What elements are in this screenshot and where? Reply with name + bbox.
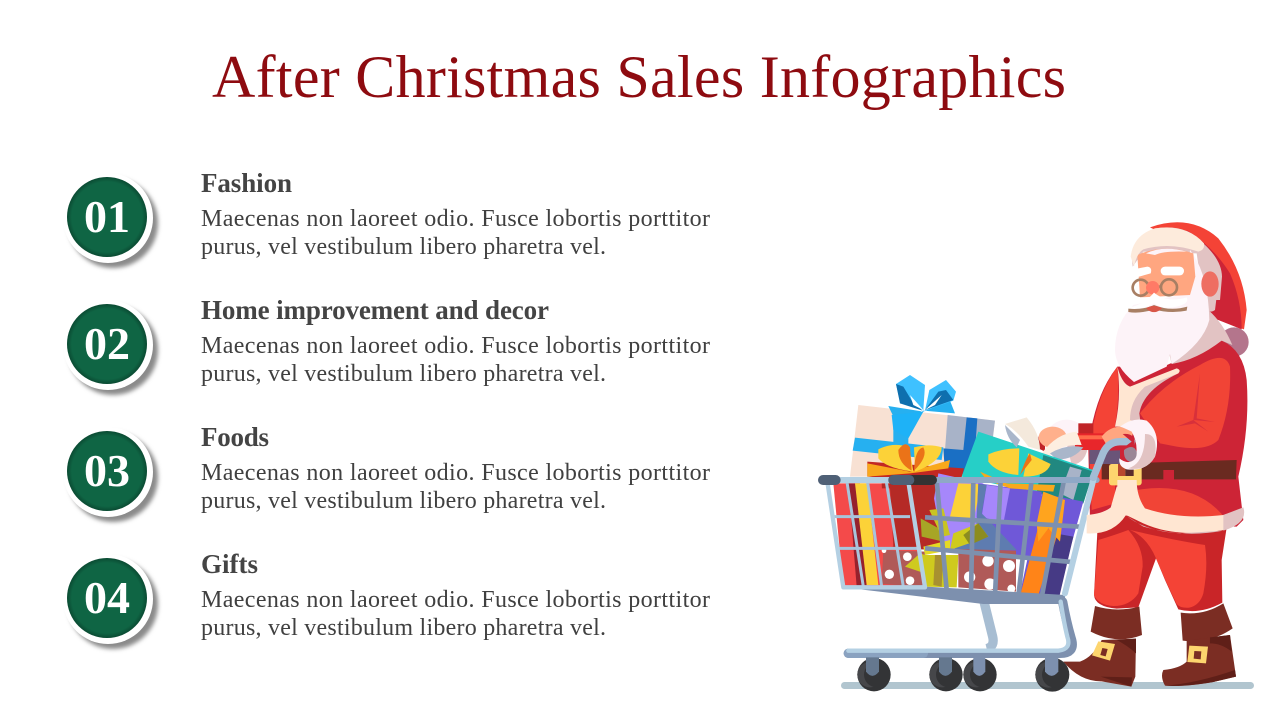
spotted gift right	[958, 549, 1016, 592]
item 4: Gifts	[63, 549, 710, 649]
gold bow on teal gift	[980, 472, 1055, 492]
badge 02	[63, 300, 158, 395]
body text	[201, 460, 710, 514]
ground shadow	[841, 682, 1254, 689]
hat brim	[1132, 227, 1222, 300]
badge 03	[63, 427, 158, 522]
item 3: Foods	[63, 422, 710, 522]
eyebrows	[1161, 267, 1184, 275]
cart wheels	[857, 657, 1069, 692]
Santa near hand and coat hem	[1087, 420, 1244, 534]
underarm	[1089, 450, 1120, 464]
belt	[1102, 460, 1237, 479]
hair back	[1167, 310, 1232, 364]
orange and violet gifts	[1020, 493, 1083, 597]
badge 04: 04	[84, 572, 130, 623]
fur centre strip	[1115, 367, 1180, 427]
coat back	[1088, 341, 1247, 527]
heading: Fashion	[201, 168, 292, 198]
heading: Gifts	[201, 549, 258, 579]
title: After Christmas Sales Infographics	[212, 44, 1066, 110]
Santa body and head	[1038, 222, 1249, 527]
moustache and mouth	[1128, 305, 1187, 313]
body text: Maecenas non laoreet odio. Fusce lobortis porttitor	[201, 587, 710, 613]
cart handle grips	[818, 475, 841, 485]
badge 03: 03	[84, 445, 130, 496]
body text: Maecenas non laoreet odio. Fusce lobortis porttitor	[201, 460, 710, 486]
cart frame	[827, 477, 1097, 653]
large cream gift	[850, 405, 995, 477]
item 1: Fashion	[63, 168, 710, 268]
heading: Home improvement and decor	[201, 295, 549, 325]
cart basket wires	[925, 480, 1080, 597]
blue bow	[888, 401, 955, 423]
body text: purus, vel vestibulum libero pharetra vel.	[201, 361, 606, 387]
ear	[1201, 271, 1219, 297]
badge 02: 02	[84, 318, 130, 369]
cart basket base	[843, 587, 1065, 604]
green bow gift	[923, 555, 958, 587]
gifts in cart	[833, 375, 1093, 597]
white ribbon on teal gift	[1005, 417, 1040, 450]
cart rear leg	[984, 602, 993, 649]
item 2: Home improvement and decor	[63, 295, 710, 395]
badge 01: 01	[84, 191, 130, 242]
body text: purus, vel vestibulum libero pharetra vel.	[201, 615, 606, 641]
beard sides	[1115, 250, 1209, 382]
badge 01	[63, 173, 158, 268]
body text: Maecenas non laoreet odio. Fusce lobortis porttitor	[201, 206, 710, 232]
badge 04	[63, 554, 158, 649]
red gift and lid	[867, 462, 964, 483]
hat	[1150, 222, 1247, 329]
coat hem fur	[1087, 480, 1244, 534]
hat pompom	[1219, 327, 1249, 357]
heading: Foods	[201, 422, 269, 452]
shopping cart	[818, 475, 1097, 692]
gold bow on red gift	[867, 460, 950, 477]
body text	[201, 587, 710, 641]
spotted gift left	[882, 550, 925, 587]
body text: purus, vel vestibulum libero pharetra vel.	[201, 234, 606, 260]
purple gift front	[977, 483, 1042, 560]
Santa legs and boots	[1063, 513, 1236, 687]
body text: purus, vel vestibulum libero pharetra vel.	[201, 488, 606, 514]
body text	[201, 333, 710, 387]
face	[1137, 249, 1195, 297]
illustration: Santa with shopping cart	[818, 222, 1254, 692]
teal gift	[962, 432, 1093, 503]
body text: Maecenas non laoreet odio. Fusce lobortis porttitor	[201, 333, 710, 359]
body text	[201, 206, 710, 260]
lower coat	[1137, 488, 1227, 520]
glasses and nose	[1133, 279, 1177, 296]
far hand	[1045, 420, 1089, 464]
purple gift back	[934, 473, 983, 550]
